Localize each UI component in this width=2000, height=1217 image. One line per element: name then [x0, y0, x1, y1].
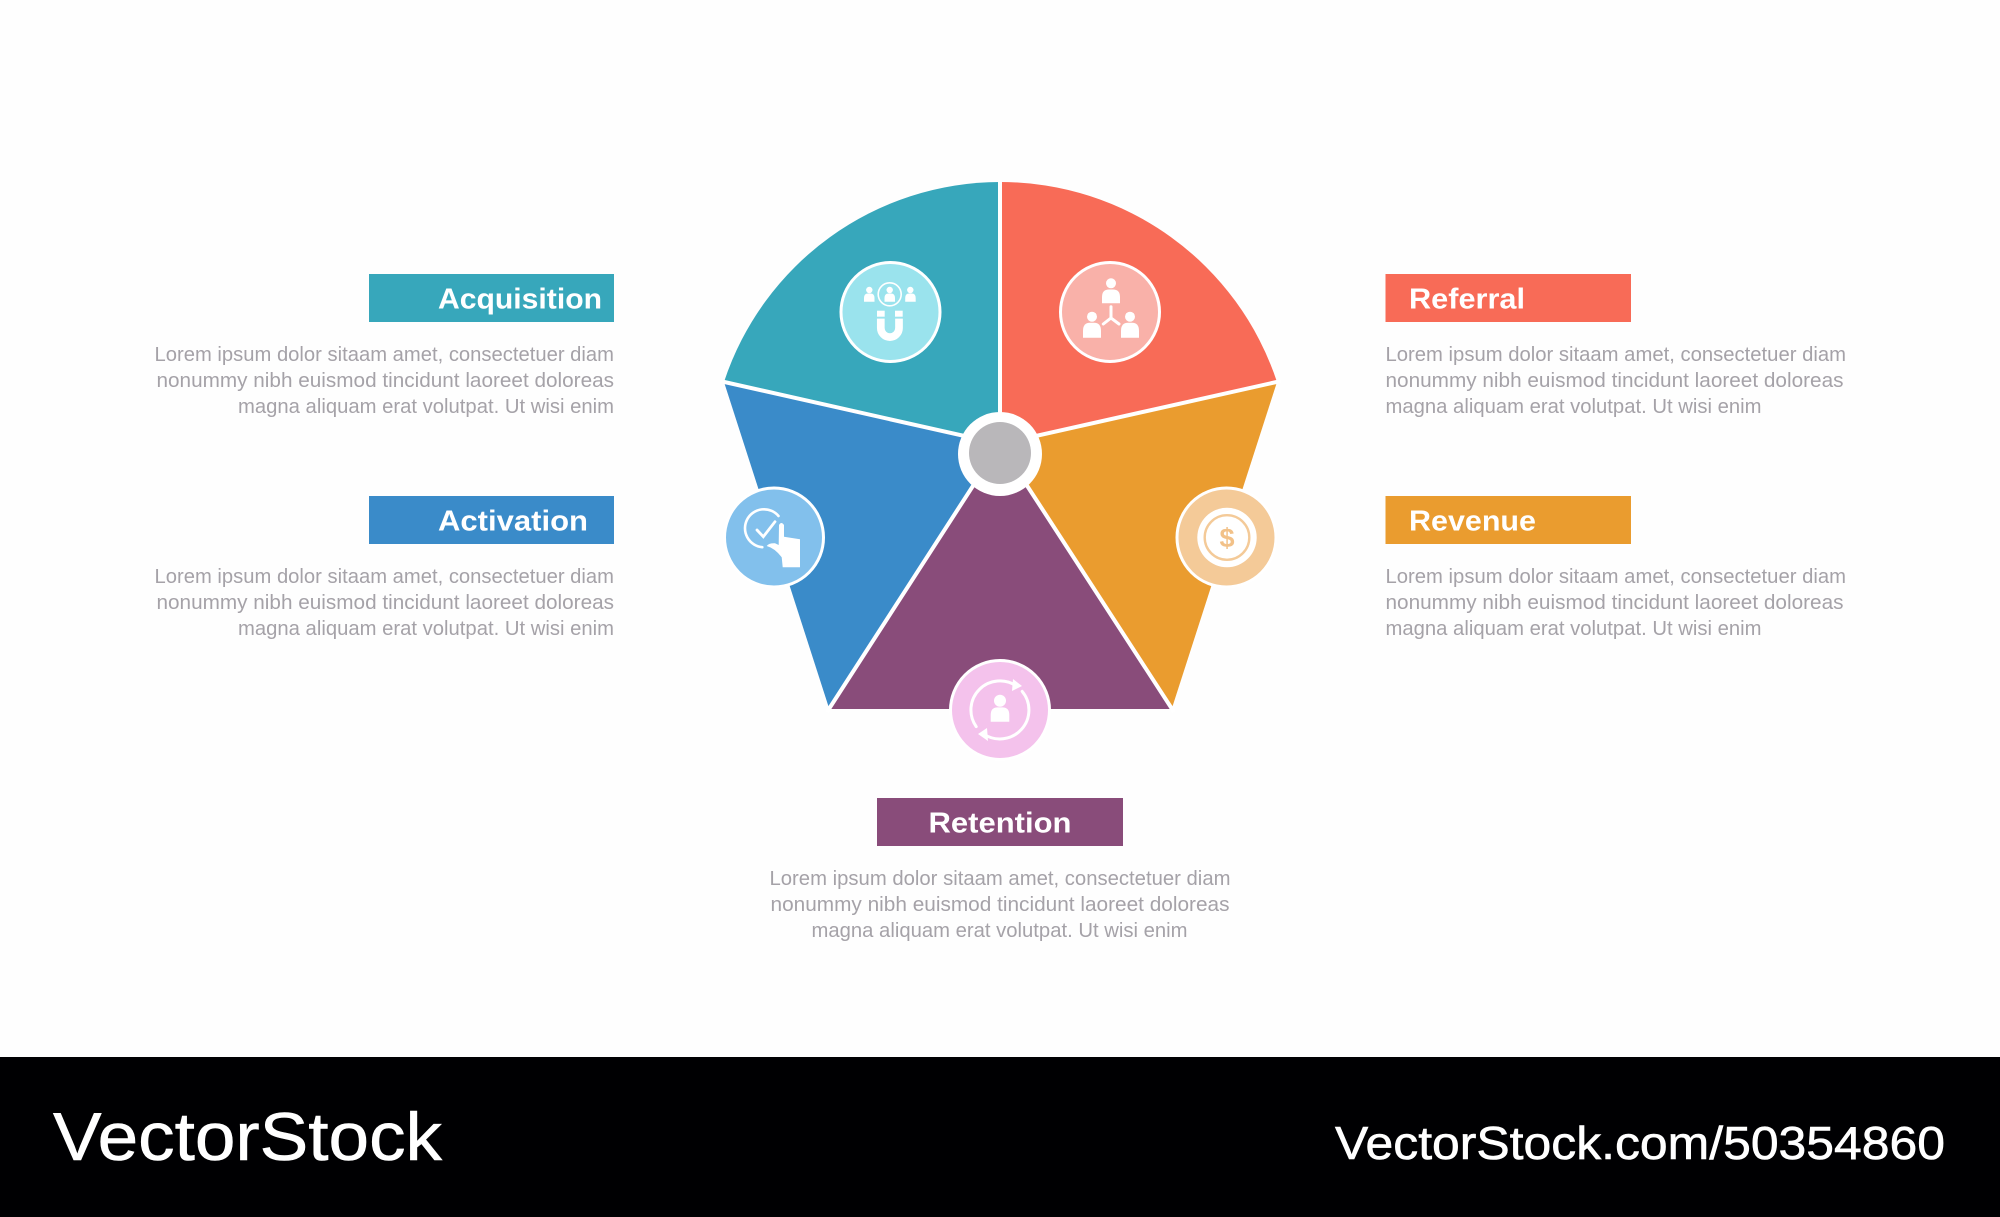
footer logo: VectorStock — [53, 1099, 443, 1175]
heading: acquisition: Acquisition — [438, 284, 602, 316]
segment: referral — [1000, 182, 1277, 444]
text block: acquisition: magna aliquam erat volutpat. Ut wisi enim — [238, 395, 614, 418]
segment: activation — [724, 382, 1000, 708]
panel: referral — [1386, 274, 1846, 418]
pentagon chart — [720, 180, 1281, 712]
icon: referral network — [1060, 262, 1160, 362]
text block: referral — [1386, 343, 1846, 418]
text block: acquisition: nonummy nibh euismod tincidunt laoreet doloreas — [156, 369, 614, 392]
icon: activation hand click — [724, 488, 824, 587]
segment: retention — [829, 444, 1171, 709]
heading: acquisition — [369, 274, 614, 322]
heading: retention — [877, 798, 1123, 846]
panel: revenue — [1386, 496, 1846, 640]
text block: activation: magna aliquam erat volutpat. Ut wisi enim — [238, 617, 614, 640]
text block: retention — [770, 867, 1230, 942]
segment: acquisition — [724, 182, 1000, 444]
text block: revenue: nonummy nibh euismod tincidunt laoreet doloreas — [1386, 591, 1844, 614]
heading: referral: Referral — [1409, 284, 1525, 316]
heading: activation: Activation — [438, 506, 588, 538]
text block: retention: magna aliquam erat volutpat. Ut wisi enim — [812, 919, 1188, 942]
icon: acquisition magnet — [841, 262, 940, 362]
text block: revenue: Lorem ipsum dolor sitaam amet, consectetuer diam — [1386, 565, 1846, 588]
panel: acquisition — [154, 274, 614, 418]
segment: revenue — [1000, 382, 1277, 708]
footer bar — [0, 1057, 2000, 1217]
text block: referral: Lorem ipsum dolor sitaam amet, consectetuer diam — [1386, 343, 1846, 366]
heading: retention: Retention — [928, 808, 1072, 840]
icon: revenue coin: $ — [1219, 523, 1235, 553]
text block: activation — [154, 565, 614, 640]
text block: referral: magna aliquam erat volutpat. Ut wisi enim — [1386, 395, 1762, 418]
text block: revenue — [1386, 565, 1846, 640]
text block: acquisition: Lorem ipsum dolor sitaam amet, consectetuer diam — [154, 343, 614, 366]
icon: revenue coin — [1177, 488, 1276, 587]
panel: activation — [154, 496, 614, 640]
heading: activation — [369, 496, 614, 544]
heading: revenue: Revenue — [1409, 506, 1536, 538]
text block: activation: nonummy nibh euismod tincidunt laoreet doloreas — [156, 591, 614, 614]
text block: retention: Lorem ipsum dolor sitaam amet, consectetuer diam — [770, 867, 1230, 890]
icon: retention cycle — [950, 660, 1050, 760]
heading: revenue — [1386, 496, 1631, 544]
text block: referral: nonummy nibh euismod tincidunt laoreet doloreas — [1386, 369, 1844, 392]
text block: activation: Lorem ipsum dolor sitaam amet, consectetuer diam — [154, 565, 614, 588]
footer image id: VectorStock.com/50354860 — [1335, 1117, 1945, 1169]
text block: revenue: magna aliquam erat volutpat. Ut wisi enim — [1386, 617, 1762, 640]
text block: retention: nonummy nibh euismod tincidunt laoreet doloreas — [770, 893, 1230, 916]
center hub — [958, 412, 1042, 496]
text block: acquisition — [154, 343, 614, 418]
heading: referral — [1386, 274, 1631, 322]
panel: retention — [770, 798, 1230, 942]
